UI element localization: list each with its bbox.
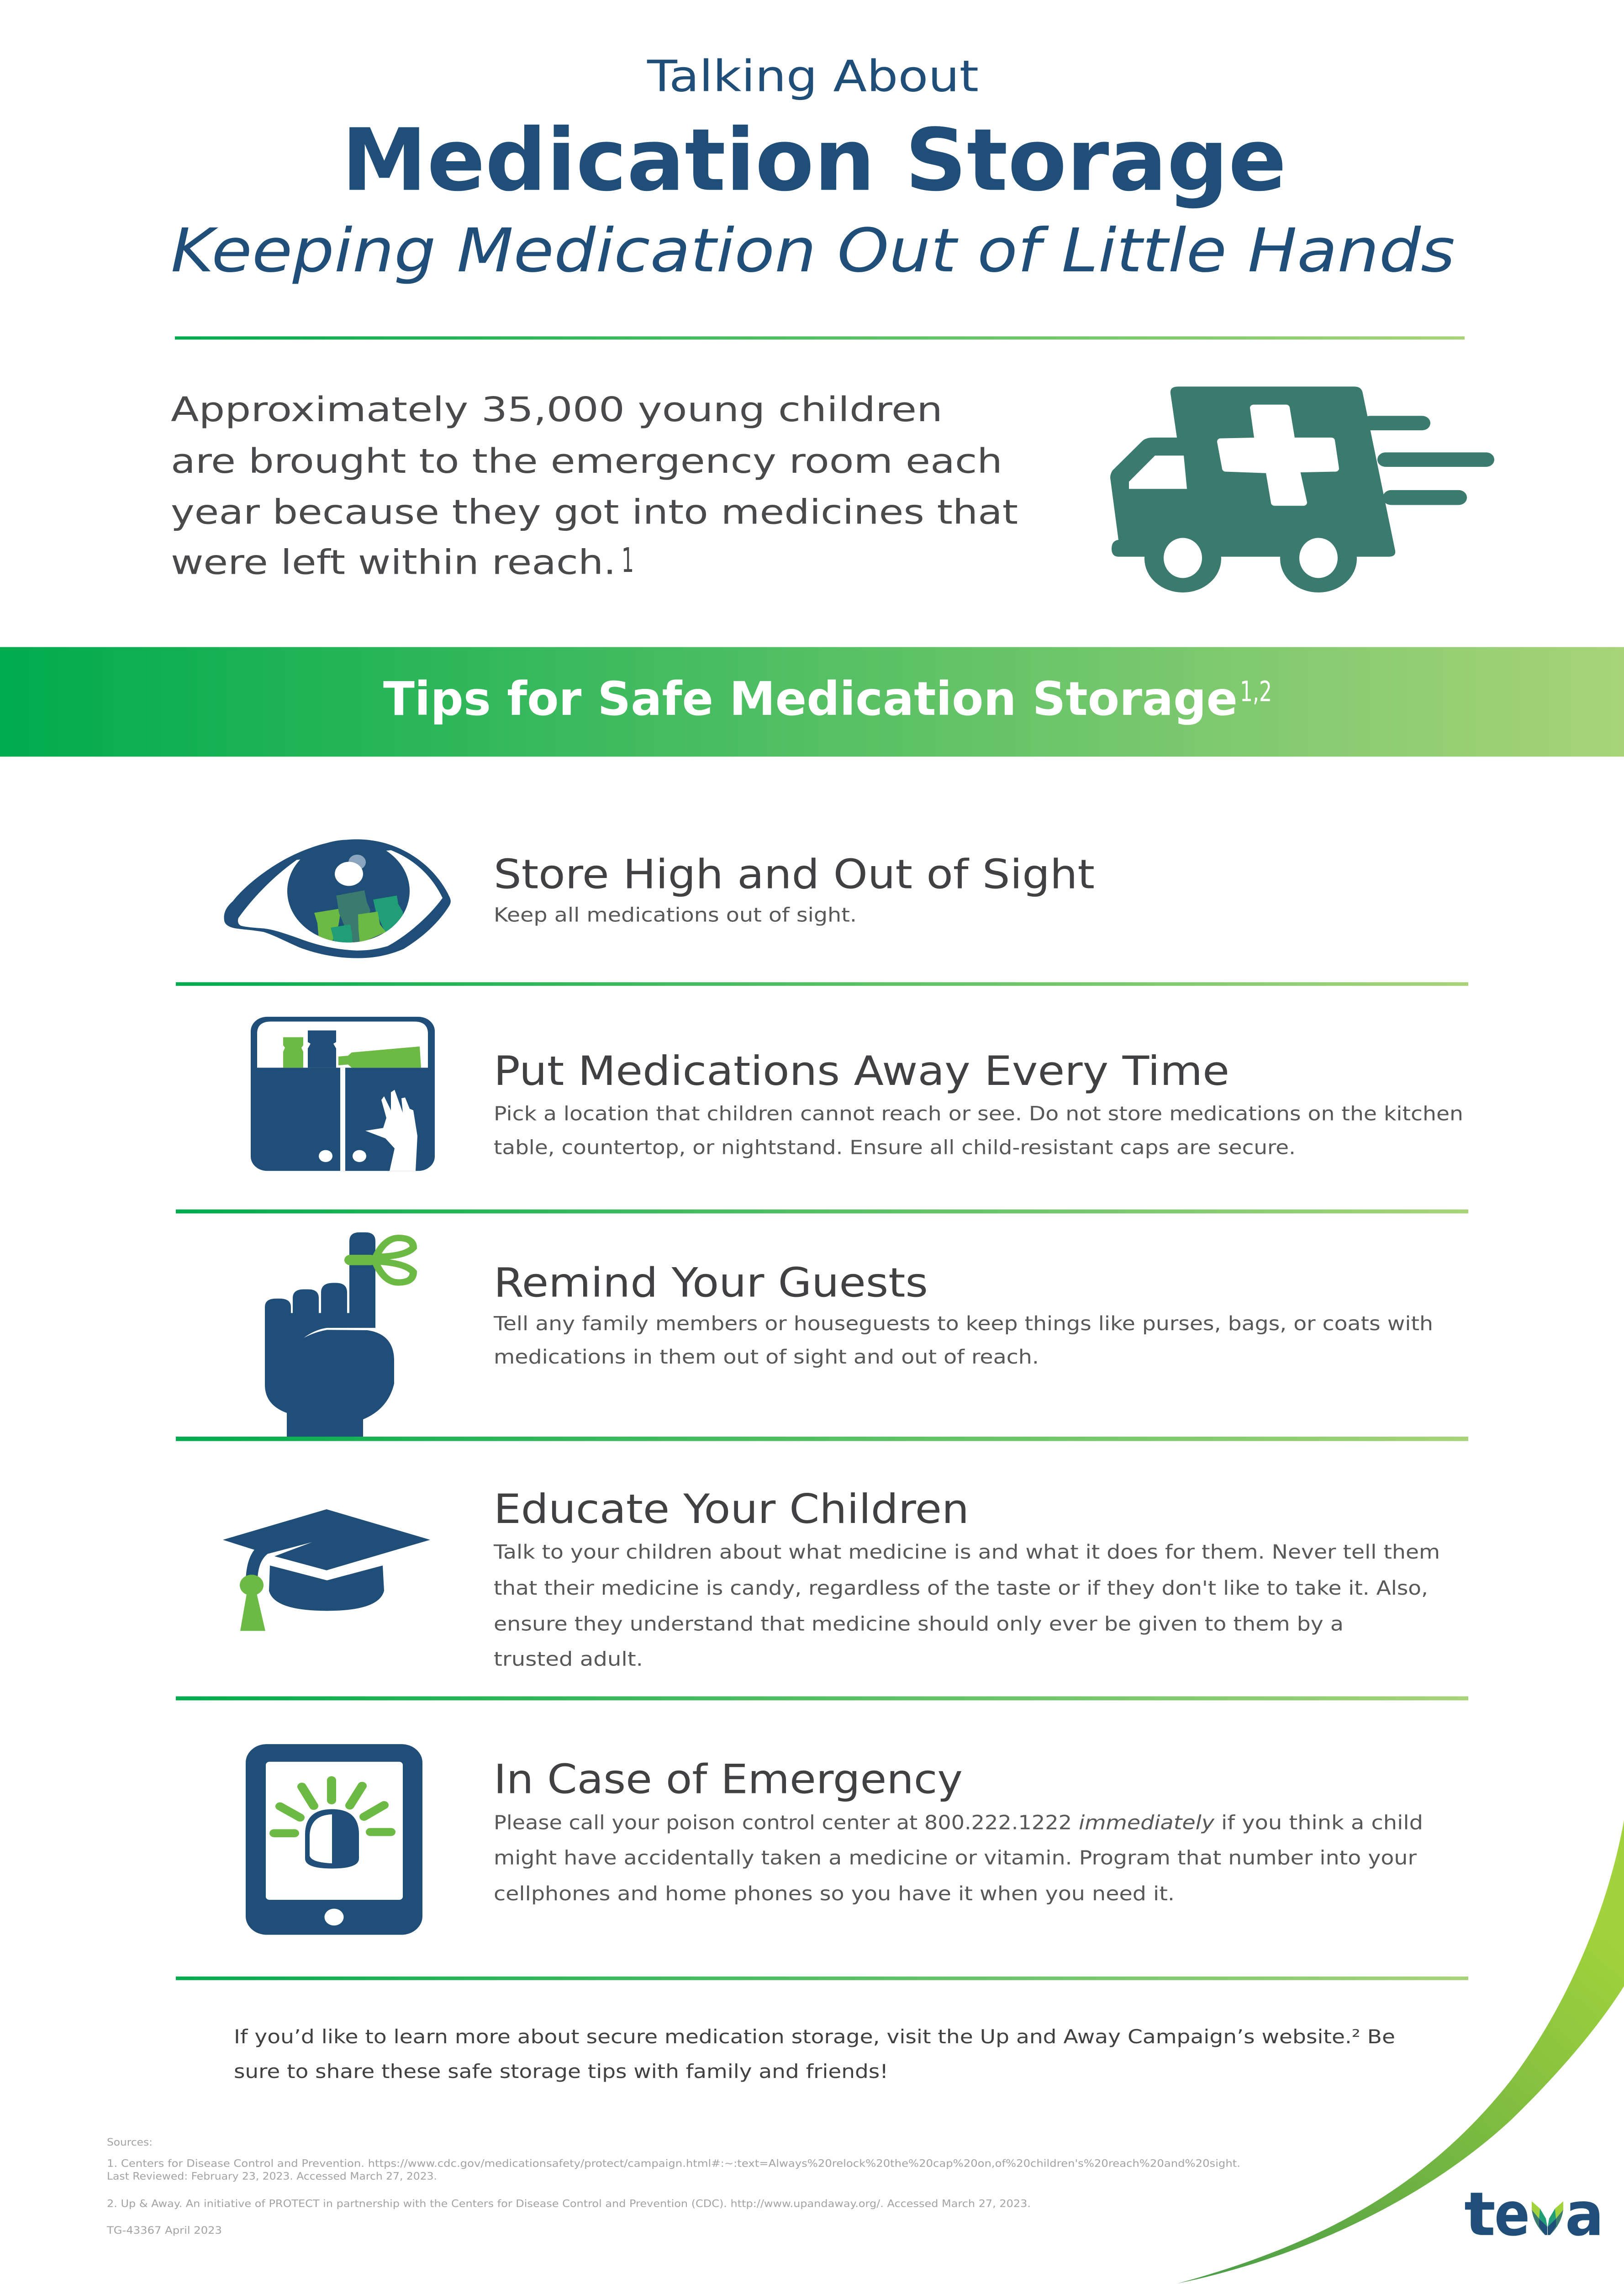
teva logo: t	[1464, 2179, 1496, 2250]
intro statistic text: 1	[622, 541, 634, 580]
icon: cabinet with hand	[251, 1017, 435, 1171]
banner: tips heading	[0, 647, 1624, 756]
intro statistic text: Approximately 35,000 young children	[171, 390, 943, 429]
sources: TG-43367 April 2023	[106, 2225, 222, 2236]
banner: tips heading: 1,2	[1240, 675, 1272, 708]
tip 3 text: Remind Your Guests	[494, 1260, 928, 1306]
tip 2 text: Pick a location that children cannot reach or see. Do not store medications on the kitchen	[494, 1102, 1463, 1125]
teva logo: a	[1565, 2179, 1604, 2250]
title: talking about: Talking About	[647, 51, 979, 101]
tip 3 text: Tell any family members or houseguests to keep things like purses, bags, or coats with	[493, 1312, 1433, 1335]
closing message: sure to share these safe storage tips with family and friends!	[234, 2060, 888, 2083]
title: medication storage: Medication Storage	[342, 110, 1287, 210]
tip 2 text	[494, 1048, 1463, 1159]
teva logo	[1464, 2179, 1604, 2250]
intro statistic text	[171, 390, 1018, 582]
banner: tips heading: Tips for Safe Medication Storage	[383, 672, 1238, 726]
icon: tablet with siren	[246, 1744, 422, 1935]
title block	[171, 51, 1455, 286]
closing message: If you’d like to learn more about secure medication storage, visit the Up and Away Campaign’s website.² Be	[234, 2025, 1395, 2048]
tip 5 text: cellphones and home phones so you have it when you need it.	[494, 1882, 1175, 1905]
tip 3 text: medications in them out of sight and out of reach.	[494, 1345, 1039, 1368]
tip 5 text	[494, 1756, 1423, 1905]
tip 3 text	[493, 1260, 1433, 1368]
tip 5 text: if you think a child	[1221, 1811, 1423, 1834]
intro statistic text: were left within reach.	[171, 543, 616, 582]
tip 4 text: Educate Your Children	[494, 1486, 969, 1533]
tip 1 text: Keep all medications out of sight.	[494, 903, 857, 926]
tip 5 text: immediately	[1079, 1811, 1215, 1834]
icon: graduation cap	[223, 1509, 430, 1631]
sources: 2. Up & Away. An initiative of PROTECT in partnership with the Centers for Disease Control and Prevention (CDC). http://www.upandaway.org/. Accessed March 27, 2023.	[107, 2198, 1031, 2210]
intro statistic text: year because they got into medicines that	[171, 493, 1018, 532]
tip 1 text	[494, 851, 1095, 926]
decorative green swoosh	[1177, 1820, 1624, 2284]
sources: 1. Centers for Disease Control and Prevention. https://www.cdc.gov/medicationsafety/protect/campaign.html#:~:text=Always%20relock%20the%20cap%20on,of%20children's%20reach%20and%20sight.	[107, 2157, 1240, 2169]
icon: hand with ribbon	[265, 1232, 413, 1439]
sources	[106, 2136, 1240, 2236]
tip 5 text: In Case of Emergency	[494, 1756, 963, 1803]
icon: ambulance	[1110, 386, 1494, 592]
tip 4 text: that their medicine is candy, regardless of the taste or if they don't like to take it. Also,	[494, 1576, 1428, 1599]
sources: Last Reviewed: February 23, 2023. Accessed March 27, 2023.	[107, 2170, 437, 2182]
tip 4 text: Talk to your children about what medicine is and what it does for them. Never tell them	[493, 1540, 1440, 1563]
tip 5 text: Please call your poison control center at 800.222.1222	[494, 1811, 1072, 1834]
subtitle: Keeping Medication Out of Little Hands	[171, 216, 1455, 286]
sources: Sources:	[107, 2136, 153, 2148]
closing message	[234, 2025, 1395, 2083]
tip 1 text: Store High and Out of Sight	[494, 851, 1095, 898]
tip 4 text	[493, 1486, 1440, 1671]
icon: eye with medicine	[224, 839, 451, 958]
tip 2 text: table, countertop, or nightstand. Ensure all child-resistant caps are secure.	[494, 1136, 1296, 1159]
teva logo: e	[1494, 2179, 1530, 2250]
tip 2 text: Put Medications Away Every Time	[494, 1048, 1229, 1095]
tip 4 text: ensure they understand that medicine should only ever be given to them by a	[494, 1612, 1344, 1635]
tip 5 text: might have accidentally taken a medicine or vitamin. Program that number into your	[494, 1846, 1417, 1869]
intro statistic text: are brought to the emergency room each	[171, 442, 1002, 481]
tip 4 text: trusted adult.	[494, 1648, 643, 1671]
